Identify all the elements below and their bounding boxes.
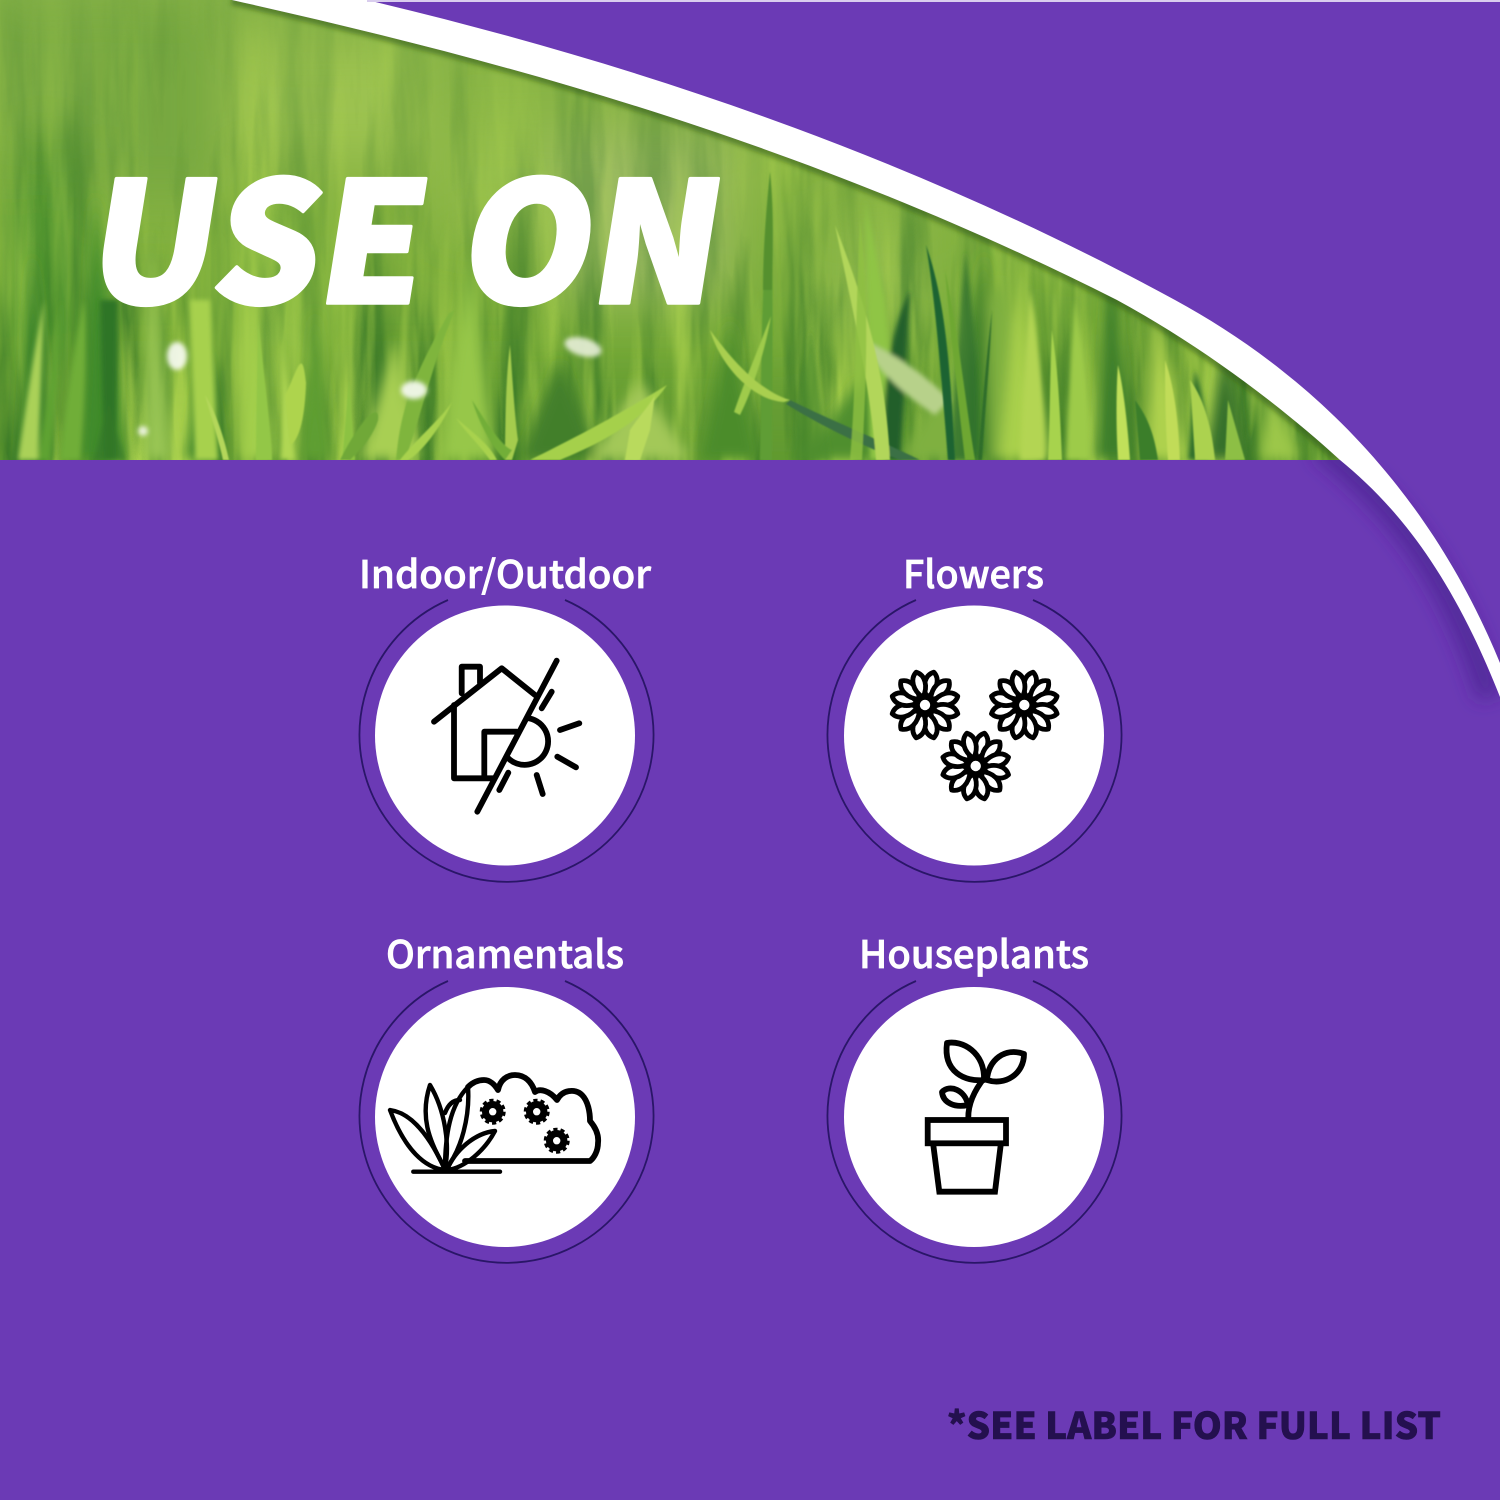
panel: Flowers [828,544,1122,882]
ring [360,981,653,1263]
ring [828,600,1122,882]
purple panel below the photo [0,460,1341,498]
panel: Ornamentals [360,924,653,1263]
white circle [375,987,635,1247]
sharp blades [205,172,1245,460]
top edge highlight [367,0,1500,2]
swoosh shadow on purple [1320,445,1490,697]
panel: Houseplants [828,924,1122,1263]
icon: shrub and plant [390,1075,598,1172]
heading: Flowers: Flowers [903,544,1044,599]
water drops [138,333,604,436]
footnote: *SEE LABEL FOR FULL LIST [947,1396,1441,1450]
icon: potted plant [928,1043,1024,1192]
blurred blades [20,190,1300,460]
icon: three flowers [891,671,1059,800]
heading: Ornamentals: Ornamentals [386,924,624,979]
panel: Indoor/Outdoor [359,544,653,882]
ring [360,600,653,882]
photo: blurred green grass banner [0,0,1340,460]
procedural vertical streaks [0,13,1340,460]
white circle [375,606,635,866]
ring [828,981,1122,1263]
title: USE ON [75,110,744,352]
white swoosh band [232,0,1500,697]
shadow next to the white swoosh [232,0,1340,460]
white circle [844,606,1104,866]
heading: Indoor/Outdoor: Indoor/Outdoor [359,544,651,599]
white circle [844,987,1104,1247]
heading: Houseplants: Houseplants [859,924,1089,979]
icon: house and sun [434,661,579,812]
